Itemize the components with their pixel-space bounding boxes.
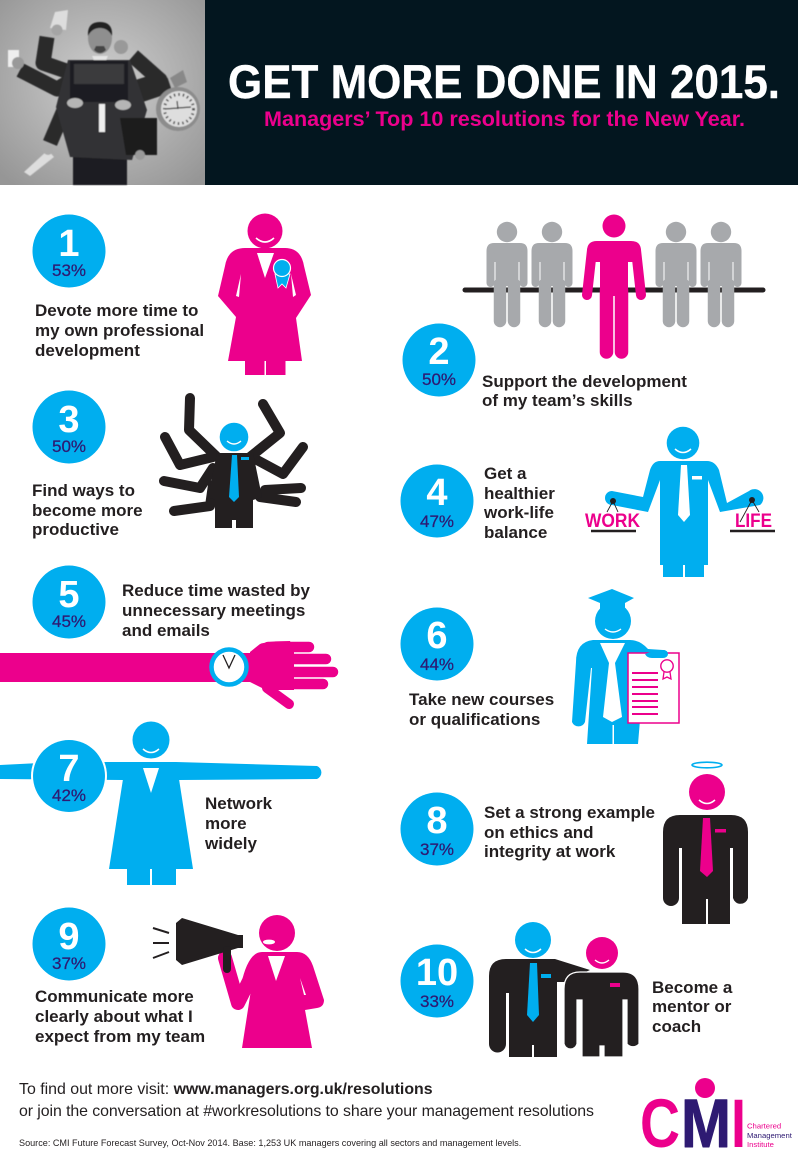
caption 7: Network [205,794,273,813]
badge 5 [32,566,106,638]
badge 9: 9 [58,916,80,958]
header band [0,0,798,185]
caption 5: Reduce time wasted by [122,581,311,600]
icon: team with one standing out [465,214,763,352]
caption 7: widely [204,834,258,853]
badge 4: 47% [420,512,454,531]
icon: woman with outstretched arms [0,722,321,885]
icon: man with halo [663,762,748,924]
badge 7: 7 [58,748,80,790]
caption 8: Set a strong example [484,803,655,822]
CMI logo: Management [747,1131,793,1140]
badge 10 [400,944,474,1018]
badge 7: 42% [52,786,86,805]
caption 4: balance [484,523,547,542]
icon: mentor with arm around mentee [489,922,639,1057]
resolution 6 [400,589,679,744]
caption 3: become more [32,501,143,520]
resolution 8 [400,762,748,924]
caption 1: Devote more time to [35,301,198,320]
badge 10: 33% [420,992,454,1011]
caption 9: Communicate more [35,987,194,1006]
caption 4: work-life [483,503,554,522]
scale: work [585,498,640,532]
call to action: To find out more visit: [19,1081,174,1098]
caption 5: unnecessary meetings [122,601,305,620]
source note: Source: CMI Future Forecast Survey, Oct-Nov 2014. Base: 1,253 UK managers covering all sectors and management levels. [19,1138,521,1148]
badge 7 [31,738,107,814]
CMI logo: Chartered [747,1122,781,1130]
CMI logo [640,1078,793,1150]
badge 4: 4 [426,472,448,514]
badge 9 [32,908,106,980]
caption 8: on ethics and [484,823,594,842]
caption 5: and emails [122,621,210,640]
CMI logo: Institute [747,1140,774,1149]
header photo: multi-armed manager [0,0,205,185]
resolution 1 [32,214,311,375]
caption 9: clearly about what I [35,1007,193,1026]
badge 6: 6 [426,615,448,657]
icon: arm with wristwatch [0,641,333,704]
caption 3: productive [32,520,119,539]
badge 3 [32,390,106,464]
scale: life: LIFE [735,511,772,532]
badge 1: 53% [52,261,86,280]
badge 1: 1 [58,223,80,265]
resolution 2 [402,214,763,410]
resolution 10 [400,922,733,1057]
badge 8 [400,792,474,866]
icon: man with many arms [164,398,303,528]
certificate [628,653,679,723]
icon: woman with megaphone [153,915,324,1048]
caption 1: my own professional [35,321,204,340]
badge 3: 3 [58,399,80,441]
caption 2: Support the development [482,372,687,391]
scale: work: WORK [585,511,640,532]
call to action: or join the conversation at #workresolutions to share your management resolutions [19,1103,594,1120]
icon: graduate with certificate [572,589,679,744]
icon: woman with rosette [218,214,311,375]
resolution 3 [32,390,303,539]
badge 4 [400,464,474,538]
caption 6: or qualifications [409,710,540,729]
caption 10: mentor or [652,997,732,1016]
caption 8: integrity at work [484,842,616,861]
badge 5: 5 [58,574,80,616]
caption 2: of my team’s skills [482,391,633,410]
caption 4: healthier [484,484,555,503]
badge 2: 50% [422,370,456,389]
caption 9: expect from my team [35,1027,205,1046]
badge 1 [32,214,106,288]
caption 7: more [205,814,247,833]
badge 9: 37% [52,954,86,973]
caption 4: Get a [484,464,527,483]
badge 8: 8 [426,800,448,842]
caption 1: development [35,341,140,360]
caption 10: coach [652,1017,701,1036]
resolution 7 [0,722,321,885]
resolution 4 [400,427,775,577]
caption 3: Find ways to [32,481,135,500]
badge 3: 50% [52,437,86,456]
subtitle: Managers’ Top 10 resolutions for the New Year. [264,108,745,131]
badge 10: 10 [416,952,458,994]
resolution 9 [32,908,324,1048]
badge 8: 37% [420,840,454,859]
badge 2 [402,324,476,396]
resolution 5 [0,566,333,704]
call to action: www.managers.org.uk/resolutions [173,1081,433,1098]
badge 5: 45% [52,612,86,631]
caption 6: Take new courses [409,690,554,709]
badge 6: 44% [420,655,454,674]
scale: life [730,497,775,532]
caption 10: Become a [652,978,733,997]
icon: man balancing work and life [585,427,775,577]
badge 6 [400,608,474,680]
badge 2: 2 [428,331,450,373]
